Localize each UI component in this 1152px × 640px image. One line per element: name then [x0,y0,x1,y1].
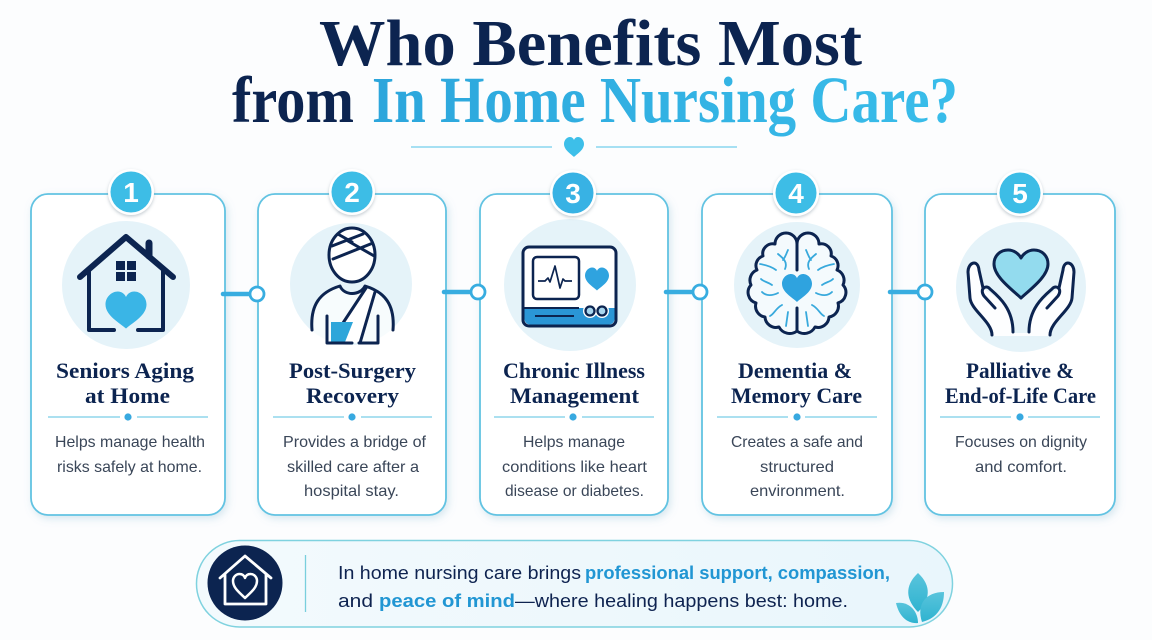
heading: Memory Care [731,383,862,408]
number badge 1: 1 [123,177,139,208]
icon background circle [956,222,1086,352]
description: Focuses on dignity [955,434,1087,451]
title: from [232,64,354,137]
connector 2 to 3 [444,285,485,299]
title: In Home Nursing Care? [372,64,958,137]
number badge 3: 3 [565,178,581,209]
connector 3 to 4 [666,285,707,299]
description [283,434,427,500]
title [232,7,958,137]
description [955,434,1087,476]
icon background circle [504,219,636,351]
description: skilled care after a [287,459,419,476]
callout text: —where healing happens best: home. [515,591,848,611]
heading: Recovery [306,383,399,408]
number badge 5 [997,170,1043,216]
heading [731,358,862,408]
title: Who Benefits Most [319,7,862,80]
icon background circle [734,222,860,348]
panel: seniors aging at home [31,194,225,515]
connector 1 to 2 [223,287,264,301]
description: environment. [750,483,845,500]
panel: palliative and end-of-life care [925,194,1115,515]
description: Creates a safe and [731,434,863,451]
number badge 2: 2 [344,177,360,208]
number badge 4 [773,170,819,216]
description [731,434,863,500]
connector 4 to 5 [890,285,932,299]
icon: hands holding heart [968,250,1074,336]
number badge 4: 4 [788,178,804,209]
number badge 5: 5 [1012,178,1028,209]
description [55,434,205,476]
callout text: peace of mind [379,591,515,611]
description: Helps manage [523,434,625,451]
number badge 2 [329,169,375,215]
callout text: and [338,591,373,611]
icon: brain with heart [748,233,846,334]
description: and comfort. [975,459,1067,476]
description: structured [760,459,834,476]
icon: house with heart [80,237,173,330]
number badge 1 [108,169,154,215]
description: conditions like heart [502,459,648,476]
icon: heart monitor [523,247,616,326]
icon: leaves [896,573,944,623]
title divider with heart [411,137,737,157]
panel: chronic illness management [480,194,668,515]
heading: Chronic Illness [503,358,645,383]
callout banner [196,540,952,627]
heading: End-of-Life Care [945,383,1096,408]
callout text [338,563,890,611]
description: disease or diabetes. [505,483,644,500]
heading [945,358,1096,408]
panel: dementia and memory care [702,194,892,515]
icon: house with heart badge [208,546,282,620]
heading: at Home [85,383,170,408]
callout text: In home nursing care brings [338,563,581,583]
icon: patient with bandage and sling [312,226,393,343]
heading: Management [510,383,640,408]
number badge 3 [550,170,596,216]
heading [56,358,194,408]
description: Helps manage health [55,434,205,451]
heading: Dementia & [738,358,852,383]
heading: Palliative & [966,358,1074,383]
icon background circle [62,221,190,349]
callout text: professional support, compassion, [585,563,890,583]
heading [289,358,416,408]
heading: Seniors Aging [56,358,194,383]
description: risks safely at home. [57,459,202,476]
panel: post-surgery recovery [258,194,446,515]
description: hospital stay. [304,483,399,500]
heading: Post-Surgery [289,358,416,383]
description [502,434,648,500]
description: Provides a bridge of [283,434,427,451]
heading [503,358,645,408]
icon background circle [290,223,412,345]
